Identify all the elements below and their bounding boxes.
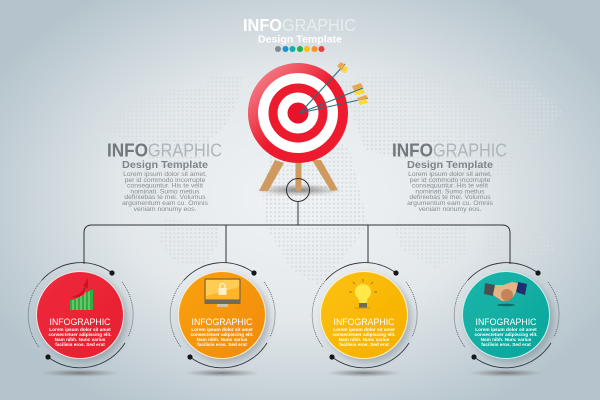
left text block: argumentum eam cu. Omnis <box>122 200 208 207</box>
right text block: Design Template <box>407 160 494 171</box>
left text block: nominati. Sumo metius <box>130 188 200 195</box>
panel: orange monitor circle: facilisis eros. Sed erat <box>197 342 247 347</box>
panel: yellow bulb circle: consectetuer adipiscing elit. <box>332 332 396 337</box>
right text block: consequuntur. His te velit <box>412 183 488 190</box>
right text block: Lorem ipsum dolor sit amet, <box>408 171 492 178</box>
left text block: consequuntur. His te velit <box>127 183 203 190</box>
arrows <box>300 62 368 113</box>
right text block: GRAPHIC <box>433 140 507 160</box>
left text block: Lorem ipsum dolor sit amet, <box>123 171 207 178</box>
dotted world map <box>100 68 562 285</box>
left text block <box>107 140 222 213</box>
panel: yellow bulb circle: Lorem ipsum dolor sit amet <box>333 327 395 332</box>
main heading: INFO <box>243 15 282 35</box>
panel: orange monitor circle: INFOGRAPHIC <box>192 317 253 328</box>
left text block: definiebas te mei. Volumus <box>124 194 206 201</box>
panel: red growth circle <box>28 263 133 377</box>
left text block: Design Template <box>122 160 209 171</box>
left text block: veniam nonumy eos. <box>134 206 196 213</box>
panel: teal handshake circle: Lorem ipsum dolor sit amet <box>475 327 537 332</box>
icon: light bulb <box>349 279 377 308</box>
left text block: INFO <box>107 140 148 160</box>
left text block: GRAPHIC <box>148 140 222 160</box>
panel: teal handshake circle: INFOGRAPHIC <box>476 317 537 328</box>
panel: red growth circle: Nam nibh. Nunc varius <box>55 337 106 342</box>
panel: yellow bulb circle <box>312 263 417 377</box>
panel: yellow bulb circle: facilisis eros. Sed erat <box>339 342 389 347</box>
right text block: definiebas te mei. Volumus <box>409 194 491 201</box>
icon: handshake <box>484 282 527 306</box>
icon: growth chart <box>70 278 93 310</box>
panel: yellow bulb circle: Nam nibh. Nunc varius <box>339 337 390 342</box>
icon: monitor with lock <box>204 279 240 307</box>
panel: orange monitor circle: Lorem ipsum dolor sit amet <box>191 327 253 332</box>
main heading: Design Template <box>258 34 342 46</box>
panel: teal handshake circle: consectetuer adipiscing elit. <box>474 332 538 337</box>
right text block: veniam nonumy eos. <box>419 206 481 213</box>
panel: teal handshake circle: Nam nibh. Nunc varius <box>481 337 532 342</box>
panel: orange monitor circle: Nam nibh. Nunc varius <box>197 337 248 342</box>
left text block: per id commodo incorrupte <box>125 177 206 184</box>
right text block: argumentum eam cu. Omnis <box>407 200 493 207</box>
panel: red growth circle: INFOGRAPHIC <box>50 317 111 328</box>
colour dots <box>275 46 324 52</box>
panel: orange monitor circle <box>170 263 275 377</box>
main heading <box>243 15 356 46</box>
icon: target on easel <box>248 62 368 196</box>
panel: red growth circle: Lorem ipsum dolor sit amet <box>49 327 111 332</box>
connector node ring <box>286 178 310 202</box>
main heading: GRAPHIC <box>282 15 356 35</box>
panel: teal handshake circle: facilisis eros. Sed erat <box>481 342 531 347</box>
panel: yellow bulb circle: INFOGRAPHIC <box>334 317 395 328</box>
connector tree <box>84 202 510 264</box>
right text block <box>392 140 507 213</box>
right text block: INFO <box>392 140 433 160</box>
panel: red growth circle: consectetuer adipiscing elit. <box>48 332 112 337</box>
right text block: per id commodo incorrupte <box>410 177 491 184</box>
panel: teal handshake circle <box>454 263 559 377</box>
right text block: nominati. Sumo metius <box>415 188 485 195</box>
panel: orange monitor circle: consectetuer adipiscing elit. <box>190 332 254 337</box>
panel: red growth circle: facilisis eros. Sed erat <box>55 342 105 347</box>
